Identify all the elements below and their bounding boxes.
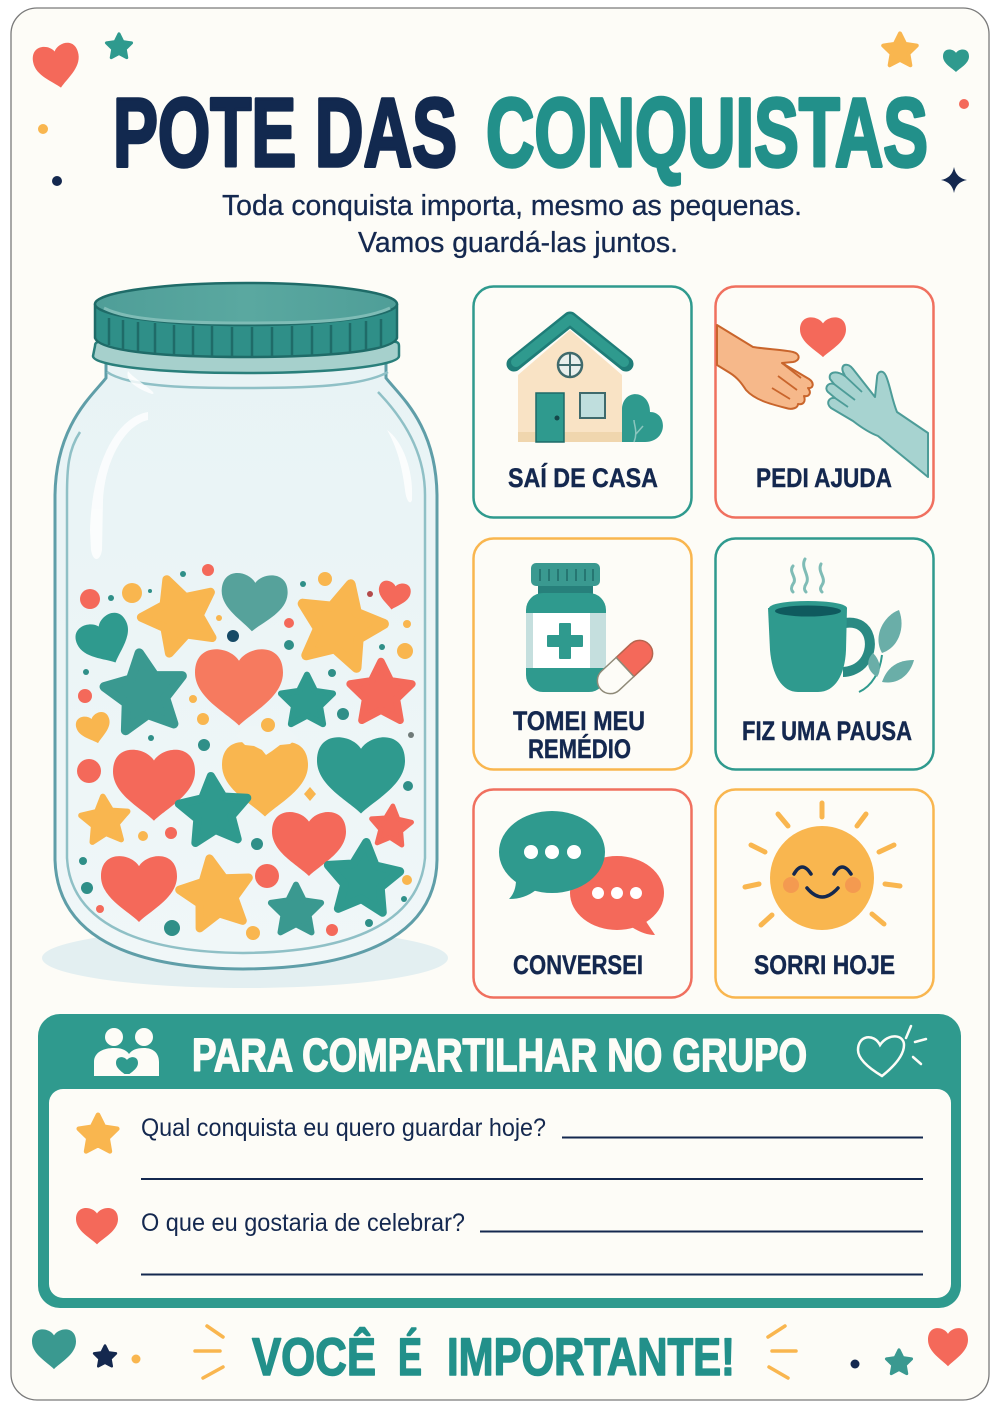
label: tomei meu remédio: TOMEI MEU — [513, 706, 645, 736]
title — [113, 78, 928, 187]
icon: mug with steam and leaves — [768, 559, 914, 692]
prompt two — [76, 1208, 923, 1274]
icon: reaching hands and heart — [717, 317, 928, 477]
icon: medicine bottle and pill — [526, 563, 658, 699]
prompt one: Qual conquista eu quero guardar hoje? — [141, 1114, 546, 1142]
decorations: top left — [31, 34, 132, 186]
label: sorri hoje: SORRI HOJE — [754, 950, 895, 980]
footer rays left — [195, 1326, 223, 1378]
label: saí de casa: SAÍ DE CASA — [508, 462, 658, 493]
label: conversei: CONVERSEI — [513, 950, 643, 980]
label: tomei meu remédio — [513, 706, 645, 764]
panel heading: PARA COMPARTILHAR NO GRUPO — [192, 1029, 807, 1081]
prompt two: O que eu gostaria de celebrar? — [141, 1209, 465, 1237]
card: tomei meu remédio — [474, 538, 692, 770]
jar contents: hearts, stars and dots — [71, 564, 414, 940]
card: saí de casa — [474, 286, 692, 518]
subtitle — [222, 190, 802, 259]
footer message: VOCÊ — [252, 1326, 376, 1387]
icon: smiling sun — [745, 803, 900, 930]
footer rays right — [768, 1326, 796, 1378]
title: POTE DAS — [113, 78, 457, 187]
panel body — [49, 1089, 951, 1298]
decorations: bottom left — [32, 1329, 140, 1369]
panel: para compartilhar no grupo — [38, 1014, 961, 1308]
footer message: IMPORTANTE! — [447, 1328, 735, 1387]
label: tomei meu remédio: REMÉDIO — [528, 733, 631, 764]
decorations: bottom right — [850, 1328, 968, 1374]
glass jar — [42, 283, 448, 988]
label: pedi ajuda: PEDI AJUDA — [756, 463, 892, 493]
jar shadow — [42, 928, 448, 988]
label: fiz uma pausa: FIZ UMA PAUSA — [742, 716, 912, 746]
footer message: É — [398, 1327, 422, 1387]
footer message — [252, 1326, 735, 1387]
icon: two people with heart — [94, 1028, 159, 1076]
lid — [93, 283, 399, 373]
icon: house — [514, 319, 663, 442]
subtitle: Toda conquista importa, mesmo as pequenas. — [222, 190, 802, 222]
jar body — [55, 362, 437, 969]
icon: heart outline with sparks — [858, 1026, 926, 1076]
card: fiz uma pausa — [716, 538, 934, 770]
decorations: top right — [883, 33, 969, 193]
subtitle: Vamos guardá-las juntos. — [358, 227, 678, 259]
card: pedi ajuda — [716, 286, 934, 518]
card: conversei — [474, 790, 692, 998]
icon: speech bubbles — [499, 811, 664, 935]
glass highlights — [90, 371, 412, 559]
prompt one — [79, 1114, 923, 1179]
card: sorri hoje — [716, 790, 934, 998]
inner glass lines — [67, 372, 425, 953]
